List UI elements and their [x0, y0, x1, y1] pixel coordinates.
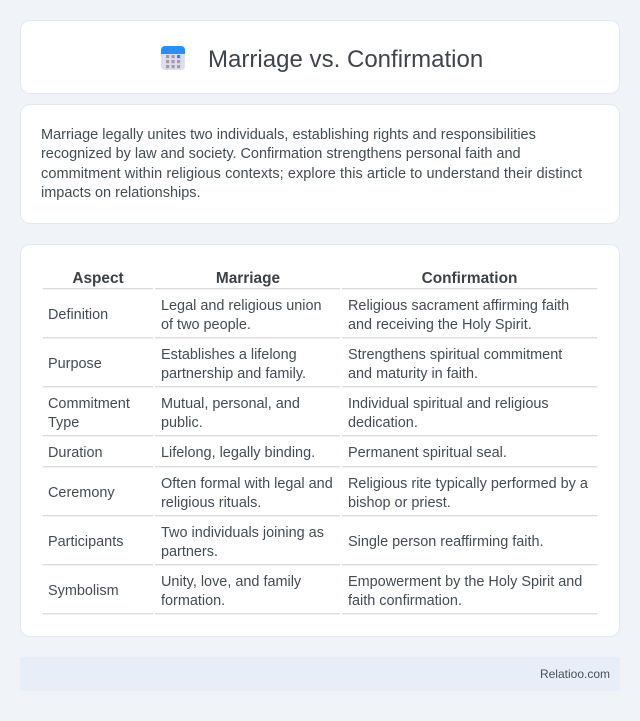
row: Purpose [48, 347, 562, 382]
icon: calendar [161, 46, 185, 70]
column heading: Marriage: Marriage [216, 270, 280, 287]
row: Definition: of two people. [161, 317, 251, 333]
row: Symbolism [48, 574, 582, 609]
row: Duration [48, 445, 507, 461]
row: Purpose: Purpose [48, 356, 102, 372]
row: Purpose: partnership and family. [161, 366, 306, 382]
row: Commitment Type: Commitment [48, 396, 130, 412]
column heading: Confirmation: Confirmation [422, 270, 517, 287]
row: Participants: Single person reaffirming faith. [348, 534, 544, 550]
row: Duration: Permanent spiritual seal. [348, 445, 507, 461]
text block: introduction [41, 127, 582, 201]
row: Symbolism: formation. [161, 593, 225, 609]
panel: introduction [20, 104, 620, 224]
row: Symbolism: Unity, love, and family [161, 574, 301, 590]
row: Purpose: Strengthens spiritual commitment [348, 347, 562, 363]
text block: introduction: recognized by law and society. Confirmation strengthens personal faith and [41, 146, 521, 162]
text block: introduction: commitment within religious contexts; explore this article to understand their distinct [41, 166, 582, 182]
row: Duration: Lifelong, legally binding. [161, 445, 315, 461]
row: Definition [48, 298, 569, 333]
row: Commitment Type: public. [161, 415, 203, 431]
row: Duration: Duration [48, 445, 103, 461]
row: Participants: Two individuals joining as [161, 525, 324, 541]
column heading: Aspect: Aspect [72, 270, 124, 287]
row: Ceremony: bishop or priest. [348, 495, 451, 511]
row: Participants: partners. [161, 544, 218, 560]
title: Marriage vs. Confirmation [208, 46, 483, 73]
row: Purpose: Establishes a lifelong [161, 347, 297, 363]
panel: comparison table [20, 244, 620, 637]
row: Participants: Participants [48, 534, 123, 550]
text block: introduction: Marriage legally unites two individuals, establishing rights and responsibilities [41, 127, 536, 143]
panel: title card [20, 20, 620, 94]
footer [20, 657, 620, 691]
row: Ceremony: religious rituals. [161, 495, 261, 511]
row: Ceremony: Often formal with legal and [161, 476, 333, 492]
row: Participants [48, 525, 544, 560]
text block: introduction: impacts on relationships. [41, 185, 201, 201]
footer text: Relatioo.com [540, 667, 610, 681]
row: Commitment Type: Mutual, personal, and [161, 396, 300, 412]
row: Purpose: and maturity in faith. [348, 366, 478, 382]
row: Ceremony: Ceremony [48, 485, 115, 501]
row: Symbolism: faith confirmation. [348, 593, 462, 609]
row: Commitment Type: Type [48, 415, 79, 431]
row: Ceremony [48, 476, 588, 511]
row: Commitment Type [48, 396, 549, 431]
row: Symbolism: Empowerment by the Holy Spirit and [348, 574, 582, 590]
row: Definition: Legal and religious union [161, 298, 322, 314]
row: Symbolism: Symbolism [48, 583, 119, 599]
row: Definition: and receiving the Holy Spirit. [348, 317, 532, 333]
row: Definition: Definition [48, 307, 108, 323]
row: Ceremony: Religious rite typically performed by a [348, 476, 588, 492]
row: Commitment Type: dedication. [348, 415, 418, 431]
row: Commitment Type: Individual spiritual and religious [348, 396, 549, 412]
row: Definition: Religious sacrament affirming faith [348, 298, 569, 314]
